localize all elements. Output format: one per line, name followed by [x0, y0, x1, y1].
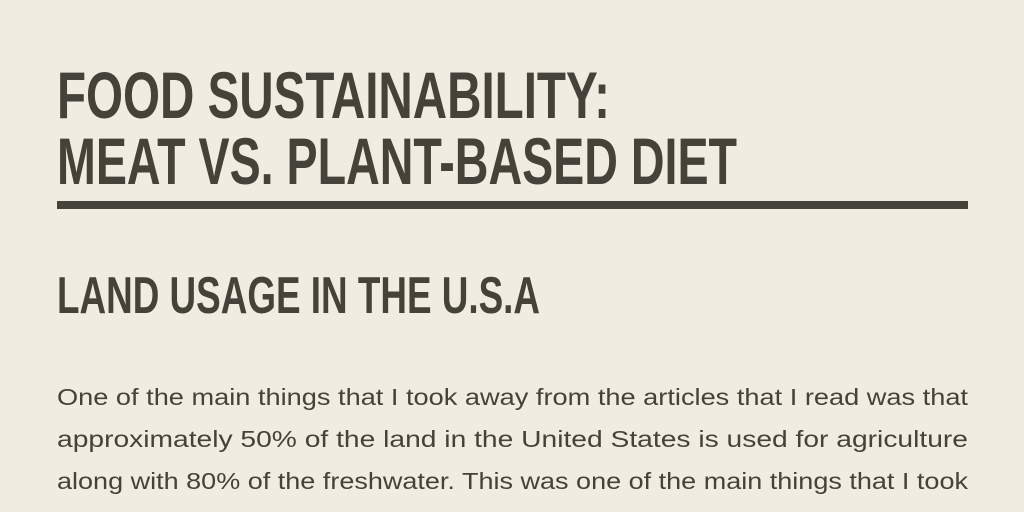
- body text: approximately 50% of the land in the United States is used for agriculture: [57, 426, 968, 452]
- title: [57, 58, 737, 198]
- body text: One of the main things that I took away from the articles that I read was that: [57, 384, 969, 410]
- section heading: LAND USAGE IN THE U.S.A: [57, 267, 540, 325]
- title: MEAT VS. PLANT-BASED DIET: [57, 124, 737, 198]
- body text: [57, 384, 969, 494]
- body text: along with 80% of the freshwater. This was one of the main things that I took: [57, 468, 969, 494]
- title: FOOD SUSTAINABILITY:: [57, 58, 610, 132]
- title underline: [57, 201, 968, 209]
